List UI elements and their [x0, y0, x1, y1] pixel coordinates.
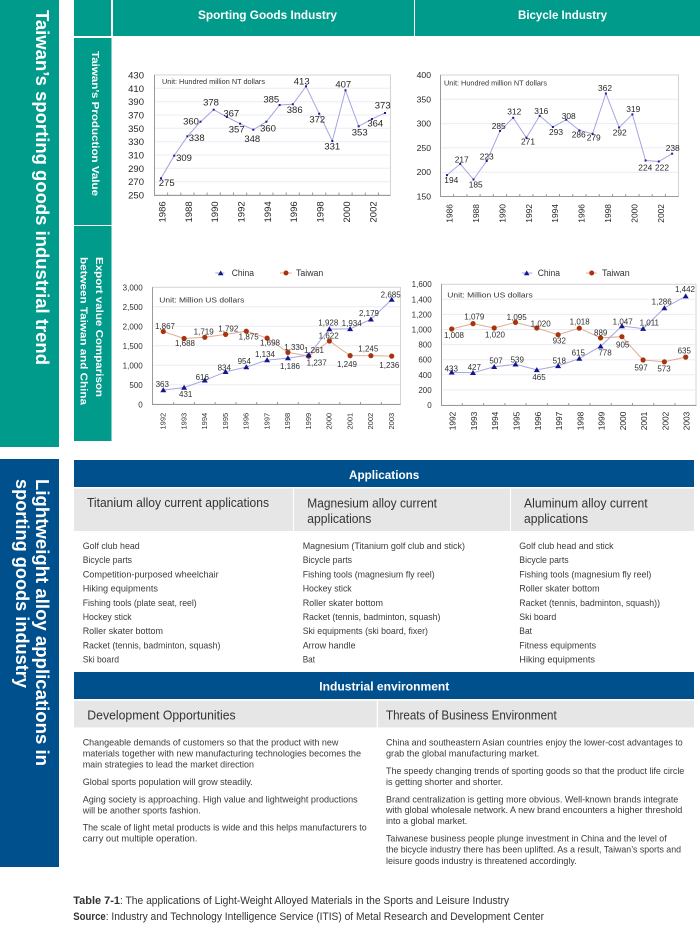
column: Magnesium alloy current applications: Magnesium alloy current — [307, 496, 437, 510]
chart: sporting goods export comparison: 1,875 — [239, 332, 259, 341]
column: Aluminum alloy current applications: Golf club head and stick — [519, 541, 614, 551]
chart: bicycle export comparison: 507 — [489, 356, 503, 365]
chart: bicycle export comparison: 1998 — [575, 411, 585, 430]
chart: sporting goods production value: 390 — [128, 97, 144, 108]
chart: sporting goods export comparison: 1992 — [158, 413, 168, 430]
chart: sporting goods production value: 367 — [223, 108, 239, 119]
chart: bicycle export comparison: 2001 — [639, 411, 649, 430]
chart: sporting goods export comparison: 954 — [238, 357, 252, 366]
chart: sporting goods production value: 360 — [260, 123, 276, 134]
chart: bicycle production value: 224 — [638, 163, 653, 173]
chart: bicycle production value: 2000 — [630, 204, 640, 223]
chart: sporting goods production value: 386 — [287, 105, 303, 116]
column: Threats of Business Environment: into a global market. — [386, 816, 467, 826]
chart: sporting goods export comparison: 2001 — [345, 413, 354, 430]
chart: sporting goods export comparison: 1,261 — [304, 346, 325, 355]
chart: bicycle production value — [417, 70, 680, 223]
column: Threats of Business Environment: is getting shorter and shorter. — [386, 777, 503, 787]
chart: sporting goods production value: 370 — [128, 110, 144, 122]
chart: sporting goods export comparison: 1997 — [262, 413, 271, 430]
chart: sporting goods production value: 407 — [335, 79, 351, 90]
chart: bicycle production value: 308 — [562, 111, 576, 121]
chart: bicycle export comparison: 1,095 — [507, 313, 527, 322]
column: Aluminum alloy current applications: Roller skater bottom — [519, 584, 600, 594]
heading: Applications — [74, 460, 694, 487]
chart: bicycle export comparison: 433 — [445, 364, 459, 373]
chart: sporting goods export comparison: 616 — [196, 373, 210, 382]
chart: sporting goods export comparison: 1,792 — [218, 324, 239, 333]
column: Magnesium alloy current applications: Bicycle parts — [303, 555, 352, 565]
side panel: Taiwan's sporting goods industrial trend: Taiwan’s sporting goods industrial trend — [32, 10, 53, 365]
chart: sporting goods export comparison: 1,500 — [123, 342, 143, 351]
chart: sporting goods production value: 410 — [128, 84, 144, 95]
chart: sporting goods export comparison: 0 — [138, 400, 143, 409]
chart: sporting goods production value: 1986 — [158, 201, 168, 222]
column: Aluminum alloy current applications — [511, 488, 694, 665]
column: Threats of Business Environment: the bicycle industry there has been uplifted. As a result, Taiwan’s sports and — [386, 845, 681, 855]
chart: bicycle export comparison: 905 — [616, 341, 630, 350]
chart: bicycle production value: 285 — [492, 121, 506, 131]
chart: sporting goods production value: 1994 — [263, 201, 274, 222]
chart: bicycle production value: 222 — [655, 163, 669, 173]
chart: sporting goods production value: 385 — [263, 95, 279, 106]
column: Threats of Business Environment — [378, 701, 694, 866]
column: Magnesium alloy current applications: Racket (tennis, badminton, squash) — [303, 612, 440, 622]
chart: bicycle export comparison: 1,286 — [652, 297, 672, 306]
chart: sporting goods export comparison: 1,867 — [155, 322, 176, 331]
column: Titanium alloy current applications: Competition-purposed wheelchair — [83, 569, 219, 579]
header band: industries — [74, 0, 700, 36]
column: Development Opportunities — [74, 701, 377, 844]
chart: bicycle export comparison: 778 — [598, 349, 612, 358]
chart: sporting goods production value: 331 — [324, 142, 340, 153]
chart: bicycle export comparison: 573 — [657, 365, 671, 374]
chart: sporting goods export comparison: 3,000 — [123, 283, 143, 292]
column: Threats of Business Environment: Brand centralization is getting more obvious. Well-known brands integrate — [386, 794, 678, 804]
chart: sporting goods export comparison: 2,500 — [123, 303, 143, 312]
chart: bicycle export comparison: 0 — [427, 401, 432, 410]
caption: table title and source: : The applications of Light-Weight Alloyed Materials in the Sports and Leisure Industry — [120, 895, 509, 907]
section: Applications table — [74, 460, 694, 665]
chart: bicycle export comparison: 932 — [553, 336, 567, 345]
column: Aluminum alloy current applications: Racket (tennis, badminton, squash)) — [519, 598, 660, 608]
column: Development Opportunities: Changeable demands of customers so that the product with new — [83, 737, 339, 747]
column: Development Opportunities: The scale of light metal products is wide and this helps manufacturers to — [83, 823, 367, 833]
chart: sporting goods export comparison: 1,236 — [379, 361, 400, 370]
chart: bicycle production value: 286 — [572, 130, 586, 140]
chart: bicycle production value: 350 — [417, 94, 431, 104]
chart: sporting goods production value: 275 — [159, 178, 175, 189]
chart: sporting goods export comparison: 1995 — [221, 413, 230, 430]
chart: bicycle production value: 1992 — [524, 204, 534, 223]
chart: sporting goods export comparison: 1998 — [283, 413, 292, 430]
column: Magnesium alloy current applications: Ski equipments (ski board, fixer) — [303, 626, 428, 636]
chart: bicycle export comparison: 1,079 — [464, 312, 485, 321]
column: Titanium alloy current applications: Golf club head — [83, 541, 140, 551]
chart: bicycle export comparison: 615 — [572, 348, 586, 357]
chart: bicycle export comparison: 427 — [468, 363, 482, 372]
column: Magnesium alloy current applications: Bat — [303, 655, 315, 665]
column: Magnesium alloy current applications — [294, 488, 510, 665]
chart: sporting goods production value: 309 — [176, 153, 192, 164]
chart: bicycle export comparison: 1,400 — [412, 295, 432, 304]
section: Industrial environment table — [74, 672, 694, 866]
chart: bicycle export comparison: 1,020 — [485, 330, 506, 339]
column: Aluminum alloy current applications: Bat — [519, 626, 532, 636]
chart: sporting goods export comparison: 500 — [129, 381, 143, 390]
chart: sporting goods production value: 310 — [128, 150, 144, 162]
column: Threats of Business Environment: leisure goods industry is threatened accordingly. — [386, 856, 577, 866]
caption: table title and source: : Industry and Technology Intelligence Service (ITIS) of Metal Research and Development Center — [106, 911, 544, 923]
column: Threats of Business Environment: China and southeastern Asian countries enjoy the lower-cost advantages to — [386, 737, 683, 747]
column: Development Opportunities: main strategies to lead the market direction — [83, 759, 254, 769]
chart: sporting goods export comparison: Unit: Million US dollars — [159, 295, 245, 304]
column: Titanium alloy current applications: Roller skater bottom — [83, 626, 163, 636]
row label: Taiwan's Production Value: Taiwan’s Production Value — [89, 51, 101, 196]
chart: sporting goods production value: 350 — [128, 124, 144, 135]
chart: bicycle production value: 223 — [480, 151, 494, 161]
chart: bicycle production value: 300 — [417, 119, 431, 129]
chart: bicycle export comparison: 1,008 — [444, 331, 465, 340]
column: Titanium alloy current applications: Fishing tools (plate seat, reel) — [83, 598, 197, 608]
chart: bicycle export comparison: 1992 — [448, 411, 458, 430]
chart: bicycle export comparison: 1997 — [554, 411, 564, 430]
column: Aluminum alloy current applications: Ski board — [519, 612, 556, 622]
chart: sporting goods export comparison: 1,000 — [123, 361, 143, 370]
chart: bicycle export comparison: 400 — [418, 371, 432, 380]
chart: sporting goods export comparison: 1,688 — [175, 339, 196, 348]
legend: China and Taiwan — [215, 268, 323, 278]
chart: sporting goods export comparison: 1,934 — [342, 319, 362, 328]
chart: bicycle export comparison: 539 — [511, 355, 525, 364]
side panel: Taiwan's sporting goods industrial trend — [0, 0, 59, 447]
column: Threats of Business Environment: grab the global manufacturing market. — [386, 749, 539, 759]
chart: sporting goods export comparison: 1,928 — [318, 319, 339, 328]
chart: bicycle export comparison: 1999 — [597, 411, 607, 430]
chart: sporting goods export comparison: 2,685 — [381, 291, 401, 300]
side panel: Lightweight alloy applications — [0, 459, 59, 867]
column: Titanium alloy current applications: Ski board — [83, 655, 119, 665]
chart: bicycle production value: 2002 — [656, 204, 666, 223]
chart: sporting goods production value: 1998 — [316, 201, 327, 222]
chart: bicycle production value: 279 — [587, 133, 601, 143]
chart: bicycle export comparison: 635 — [678, 347, 692, 356]
chart: bicycle production value: 150 — [417, 192, 431, 202]
chart: sporting goods production value: 1990 — [210, 201, 221, 222]
column: Magnesium alloy current applications: Magnesium (Titanium golf club and stick) — [303, 541, 465, 551]
chart: bicycle export comparison: Unit: Million US dollars — [447, 290, 533, 299]
header band: industries: Sporting Goods Industry — [198, 8, 337, 22]
heading: Applications: Applications — [349, 468, 420, 482]
chart: sporting goods production value: 2002 — [368, 201, 379, 222]
legend: China and Taiwan: China — [232, 268, 254, 278]
chart: sporting goods production value: 1988 — [184, 201, 195, 222]
chart: sporting goods export comparison: 2000 — [325, 413, 334, 430]
column: Threats of Business Environment: Threats of Business Environment — [386, 708, 557, 722]
side panel: Lightweight alloy applications: sporting goods industry — [12, 479, 32, 688]
chart: sporting goods production value: 353 — [352, 128, 368, 139]
column: Aluminum alloy current applications: Fishing tools (magnesium fly reel) — [519, 569, 651, 579]
chart: bicycle production value: 238 — [666, 143, 680, 153]
column: Aluminum alloy current applications: Bicycle parts — [519, 555, 569, 565]
chart: bicycle export comparison: 518 — [553, 357, 567, 366]
column: Aluminum alloy current applications: Aluminum alloy current — [524, 496, 648, 510]
chart: bicycle export comparison: 200 — [418, 386, 432, 395]
chart: bicycle production value: 1996 — [577, 204, 587, 223]
legend: China and Taiwan: Taiwan — [602, 268, 630, 278]
chart: sporting goods production value: 430 — [128, 70, 144, 82]
chart: bicycle export comparison: 1996 — [533, 411, 543, 430]
chart: sporting goods export comparison: 1,330 — [284, 343, 305, 352]
chart: bicycle export comparison: 1995 — [512, 411, 522, 430]
chart: sporting goods export comparison — [123, 268, 401, 430]
chart: bicycle production value: 400 — [417, 70, 431, 80]
chart: sporting goods production value: 250 — [128, 190, 144, 202]
chart: bicycle export comparison: 2000 — [618, 411, 628, 430]
chart: sporting goods export comparison: 1,698 — [260, 339, 281, 348]
chart: bicycle export comparison: 1,600 — [412, 280, 432, 289]
chart: bicycle production value: 292 — [613, 128, 627, 138]
chart: sporting goods production value: 2000 — [342, 201, 353, 222]
chart: sporting goods production value: 270 — [128, 177, 144, 188]
chart: sporting goods export comparison: 1993 — [179, 413, 188, 430]
chart: bicycle export comparison: 1,200 — [412, 310, 432, 319]
chart: bicycle production value: 319 — [626, 104, 641, 114]
column: Threats of Business Environment: with global wholesale network. A new brand encounters a higher threshold — [385, 805, 682, 815]
caption: table title and source — [73, 895, 544, 923]
chart: bicycle production value: 1986 — [444, 204, 454, 223]
column: Titanium alloy current applications: Titanium alloy current applications — [87, 496, 269, 510]
chart: sporting goods export comparison: 834 — [218, 363, 232, 372]
caption: table title and source: Table 7-1 — [73, 895, 120, 907]
chart: sporting goods export comparison: 1994 — [200, 413, 209, 430]
chart: bicycle production value: 316 — [534, 106, 549, 116]
chart: bicycle export comparison: 1,011 — [640, 318, 660, 327]
column: Threats of Business Environment: The speedy changing trends of sporting goods so that the product life circle — [386, 766, 684, 776]
chart: bicycle production value: 1994 — [550, 204, 560, 223]
chart: bicycle production value: 250 — [417, 143, 431, 153]
column: Titanium alloy current applications — [74, 488, 293, 665]
chart: bicycle export comparison: 1,047 — [613, 317, 633, 326]
row label: Export value comparison: between Taiwan and China — [78, 257, 90, 405]
chart: bicycle export comparison: 1,000 — [412, 326, 432, 334]
chart: sporting goods production value: 348 — [244, 134, 260, 145]
chart: sporting goods export comparison: 431 — [179, 390, 193, 399]
chart: bicycle production value: 293 — [549, 127, 563, 137]
column: Development Opportunities: materials together with new manufacturing technologies becomes the — [83, 748, 361, 758]
column: Development Opportunities: Development Opportunities — [87, 708, 236, 722]
chart: bicycle export comparison: 1,020 — [531, 320, 551, 329]
column: Magnesium alloy current applications: Fishing tools (magnesium fly reel) — [303, 569, 435, 579]
chart: bicycle production value: 200 — [417, 167, 431, 177]
side panel: Lightweight alloy applications: Lightweight alloy applications in — [32, 479, 52, 766]
chart: bicycle export comparison: 1,442 — [675, 285, 696, 294]
column: Aluminum alloy current applications: Fitness equipments — [519, 640, 596, 650]
row label: Export value comparison: Export value Comparison — [93, 257, 105, 397]
chart: sporting goods export comparison: 1,245 — [358, 344, 379, 353]
header band: industries: Bicycle Industry — [518, 8, 607, 22]
row label: Export value comparison — [74, 226, 112, 441]
caption: table title and source: Source — [73, 911, 106, 923]
column: Development Opportunities: will be another sports fashion. — [82, 805, 201, 815]
chart: sporting goods production value: 413 — [294, 76, 310, 87]
chart: sporting goods export comparison: 2002 — [366, 413, 375, 430]
chart: sporting goods export comparison: 1996 — [242, 413, 250, 430]
chart: bicycle production value: 271 — [521, 137, 535, 147]
column: Aluminum alloy current applications: applications — [524, 512, 588, 526]
chart: sporting goods production value: 373 — [375, 100, 391, 111]
column: Titanium alloy current applications: Hiking equipments — [83, 584, 158, 594]
column: Magnesium alloy current applications: Arrow handle — [303, 640, 356, 650]
legend: China and Taiwan: Taiwan — [296, 268, 323, 278]
chart: sporting goods production value: 360 — [183, 117, 199, 128]
heading: Industrial environment — [74, 672, 694, 699]
legend: China and Taiwan — [522, 268, 630, 278]
chart: bicycle production value: 217 — [455, 155, 469, 165]
chart: bicycle export comparison: 2003 — [682, 411, 692, 430]
heading: Industrial environment: Industrial environment — [319, 680, 449, 694]
chart: bicycle export comparison: 2002 — [660, 411, 670, 430]
chart: bicycle export comparison: 1,018 — [570, 317, 590, 326]
column: Threats of Business Environment: Taiwanese business people plunge investment in China and the level of — [386, 834, 667, 844]
chart: sporting goods production value — [128, 70, 391, 222]
chart: sporting goods export comparison: 1,186 — [280, 362, 301, 371]
chart: bicycle export comparison: 800 — [418, 341, 432, 350]
column: Titanium alloy current applications: Bicycle parts — [83, 555, 132, 565]
column: Development Opportunities: Aging society is approaching. High value and lightweight productions — [83, 794, 358, 804]
column: Magnesium alloy current applications: Roller skater bottom — [303, 598, 383, 608]
chart: bicycle production value: 185 — [469, 180, 483, 190]
chart: sporting goods export comparison: 1999 — [304, 413, 313, 430]
column: Titanium alloy current applications: Hockey stick — [83, 612, 132, 622]
chart: bicycle export comparison — [412, 268, 696, 430]
chart: bicycle production value: 1998 — [603, 204, 613, 223]
chart: sporting goods production value: 372 — [309, 115, 325, 126]
column: Aluminum alloy current applications: Hiking equipments — [519, 655, 595, 665]
chart: sporting goods export comparison: 1,719 — [194, 327, 214, 336]
chart: bicycle export comparison: 889 — [594, 328, 608, 337]
chart: bicycle production value: Unit: Hundred million NT dollars — [444, 78, 547, 88]
chart: bicycle production value: 312 — [507, 106, 522, 116]
chart: bicycle production value: 362 — [598, 83, 612, 93]
chart: bicycle export comparison: 597 — [634, 363, 648, 372]
chart: sporting goods production value: 338 — [189, 133, 205, 144]
chart: sporting goods export comparison: 2,179 — [359, 309, 380, 318]
chart: sporting goods export comparison: 1,134 — [255, 350, 276, 359]
chart: sporting goods production value: 290 — [128, 164, 144, 175]
chart: bicycle production value: 194 — [444, 175, 459, 185]
chart: sporting goods production value: 364 — [367, 119, 383, 130]
chart: sporting goods production value: 1996 — [289, 201, 300, 222]
column: Magnesium alloy current applications: applications — [307, 512, 371, 526]
chart: bicycle export comparison: 465 — [532, 373, 546, 382]
chart: sporting goods production value: 357 — [229, 125, 245, 136]
row label: Taiwan's Production Value — [74, 38, 112, 225]
chart: bicycle export comparison: 1993 — [469, 411, 479, 430]
chart: sporting goods export comparison: 2,000 — [123, 322, 143, 331]
chart: bicycle export comparison: 600 — [418, 356, 432, 365]
chart: sporting goods export comparison: 1,622 — [319, 331, 339, 340]
chart: sporting goods production value: Unit: Hundred million NT dollars — [162, 77, 265, 86]
chart: sporting goods export comparison: 1,249 — [337, 360, 358, 369]
chart: sporting goods export comparison: 363 — [156, 380, 170, 389]
column: Development Opportunities: Global sports population will grow steadily. — [83, 777, 253, 787]
chart: sporting goods production value: 1992 — [236, 201, 248, 222]
chart: sporting goods production value: 330 — [128, 137, 144, 148]
chart: bicycle production value: 1990 — [497, 204, 507, 223]
column: Development Opportunities: carry out multiple operation. — [83, 834, 197, 844]
column: Titanium alloy current applications: Racket (tennis, badminton, squash) — [83, 640, 220, 650]
chart: bicycle export comparison: 1994 — [490, 411, 500, 430]
chart: bicycle production value: 1988 — [471, 204, 481, 223]
chart: sporting goods production value: 378 — [203, 98, 219, 109]
chart: sporting goods export comparison: 2003 — [387, 413, 396, 430]
legend: China and Taiwan: China — [538, 268, 560, 278]
column: Magnesium alloy current applications: Hockey stick — [303, 584, 352, 594]
chart: sporting goods export comparison: 1,237 — [307, 359, 327, 368]
